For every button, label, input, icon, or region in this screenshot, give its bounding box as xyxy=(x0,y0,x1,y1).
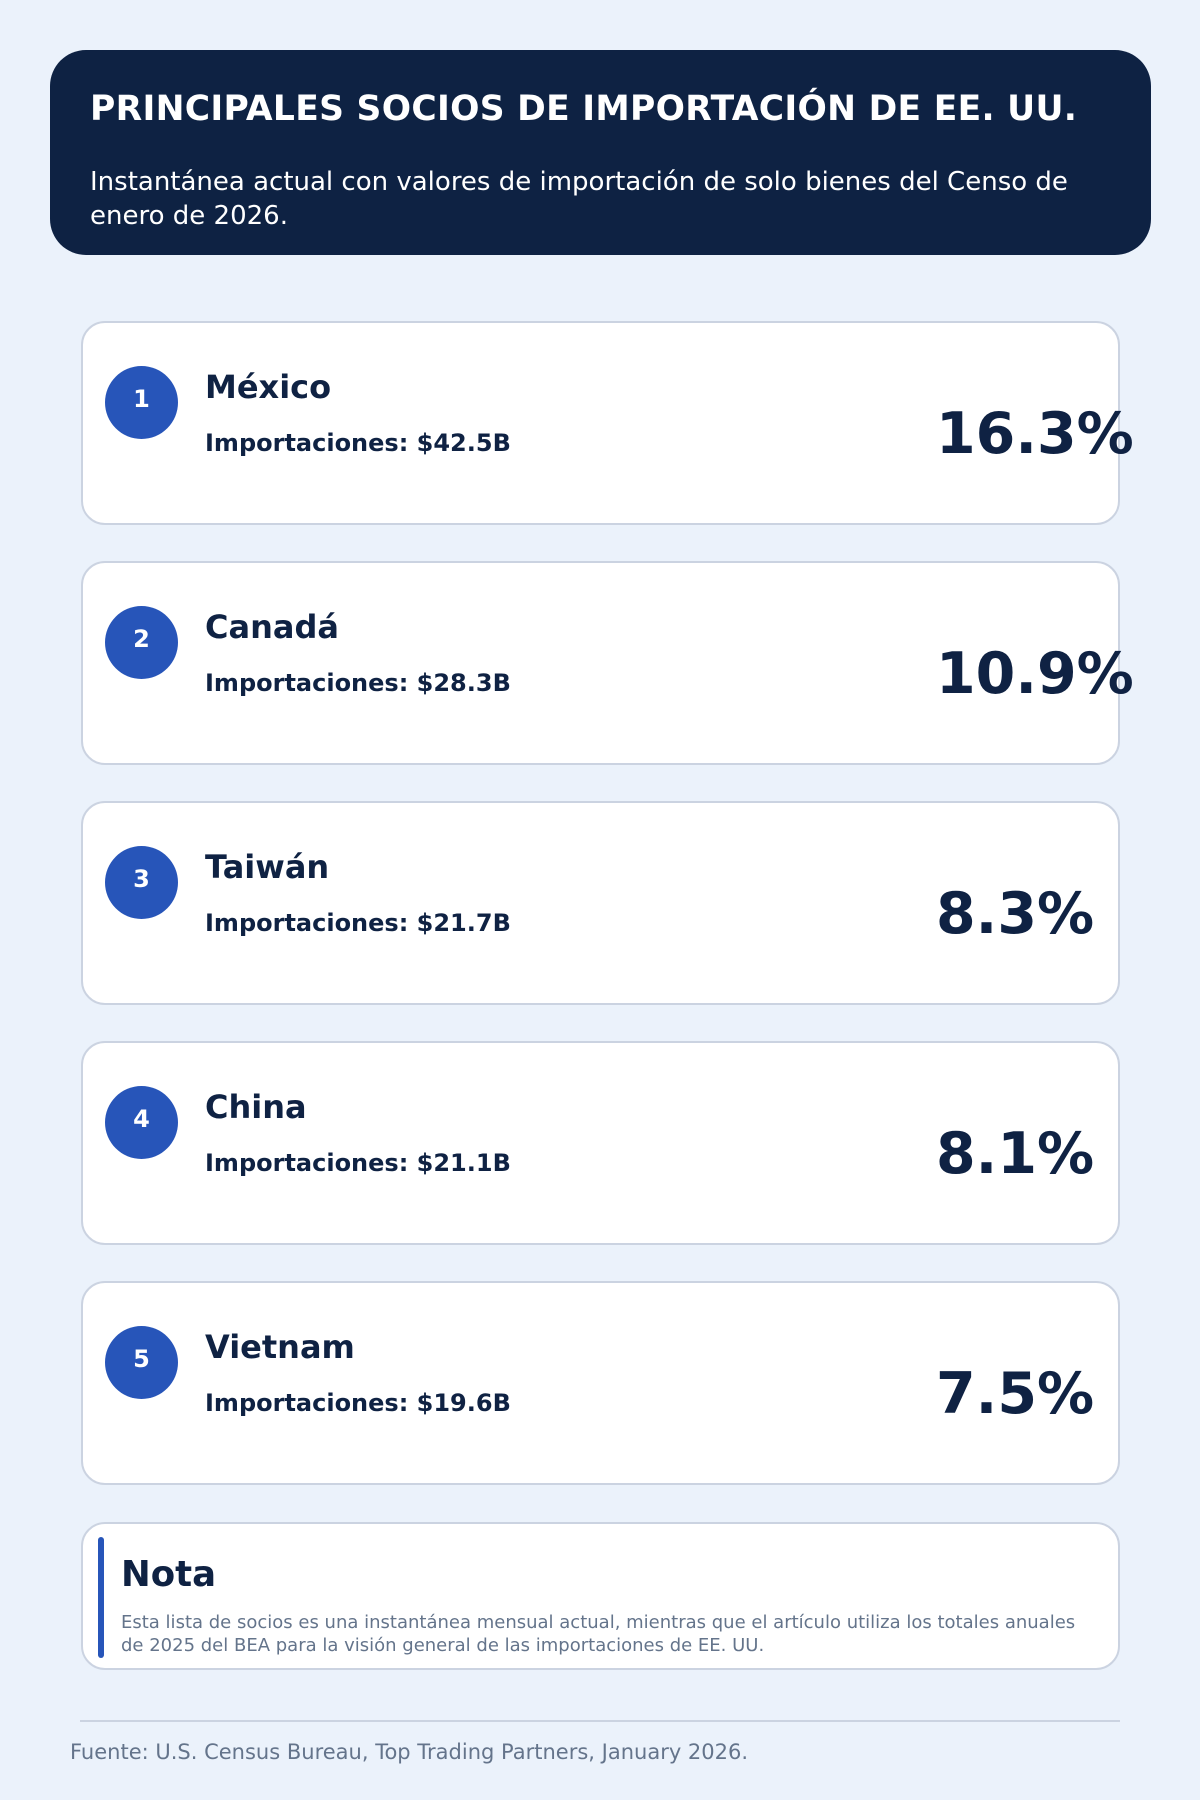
share percentage: 8.3% xyxy=(936,881,1094,947)
accent bar xyxy=(98,1537,104,1658)
title: PRINCIPALES SOCIOS DE IMPORTACIÓN DE EE. UU. xyxy=(90,89,1077,129)
rank badge 2: 2 xyxy=(133,625,150,653)
country name: México xyxy=(205,368,331,406)
rank badge 5: 5 xyxy=(133,1345,150,1373)
rank badge 5 xyxy=(105,1326,178,1399)
country name: Vietnam xyxy=(205,1328,355,1366)
note panel xyxy=(81,1522,1120,1670)
imports value: Importaciones: $42.5B xyxy=(205,429,511,457)
imports value: Importaciones: $28.3B xyxy=(205,669,511,697)
imports value: Importaciones: $19.6B xyxy=(205,1389,511,1417)
card: Vietnam xyxy=(81,1281,1120,1485)
note heading: Nota xyxy=(121,1554,216,1595)
country name: Canadá xyxy=(205,608,339,646)
rank badge 3: 3 xyxy=(133,865,150,893)
share percentage: 8.1% xyxy=(936,1121,1094,1187)
share percentage: 16.3% xyxy=(936,401,1134,467)
card: Canada xyxy=(81,561,1120,765)
card: China xyxy=(81,1041,1120,1245)
rank badge 2 xyxy=(105,606,178,679)
share percentage: 10.9% xyxy=(936,641,1134,707)
subtitle: Instantánea actual con valores de importación de solo bienes del Censo de enero de 2026. xyxy=(90,167,1068,231)
rank badge 1: 1 xyxy=(133,385,150,413)
imports value: Importaciones: $21.7B xyxy=(205,909,511,937)
share percentage: 7.5% xyxy=(936,1361,1094,1427)
rank badge 1 xyxy=(105,366,178,439)
header banner xyxy=(50,50,1151,255)
rank badge 4 xyxy=(105,1086,178,1159)
imports value: Importaciones: $21.1B xyxy=(205,1149,511,1177)
rank badge 3 xyxy=(105,846,178,919)
country name: China xyxy=(205,1088,307,1126)
card: Mexico xyxy=(81,321,1120,525)
note text: Esta lista de socios es una instantánea mensual actual, mientras que el artículo utiliza los totales anuales de 2025 del BEA para la visión general de las importaciones de EE. UU. xyxy=(121,1612,1075,1656)
country name: Taiwán xyxy=(205,848,329,886)
source footer: Fuente: U.S. Census Bureau, Top Trading Partners, January 2026. xyxy=(70,1740,748,1764)
card: Taiwan xyxy=(81,801,1120,1005)
rank badge 4: 4 xyxy=(133,1105,150,1133)
